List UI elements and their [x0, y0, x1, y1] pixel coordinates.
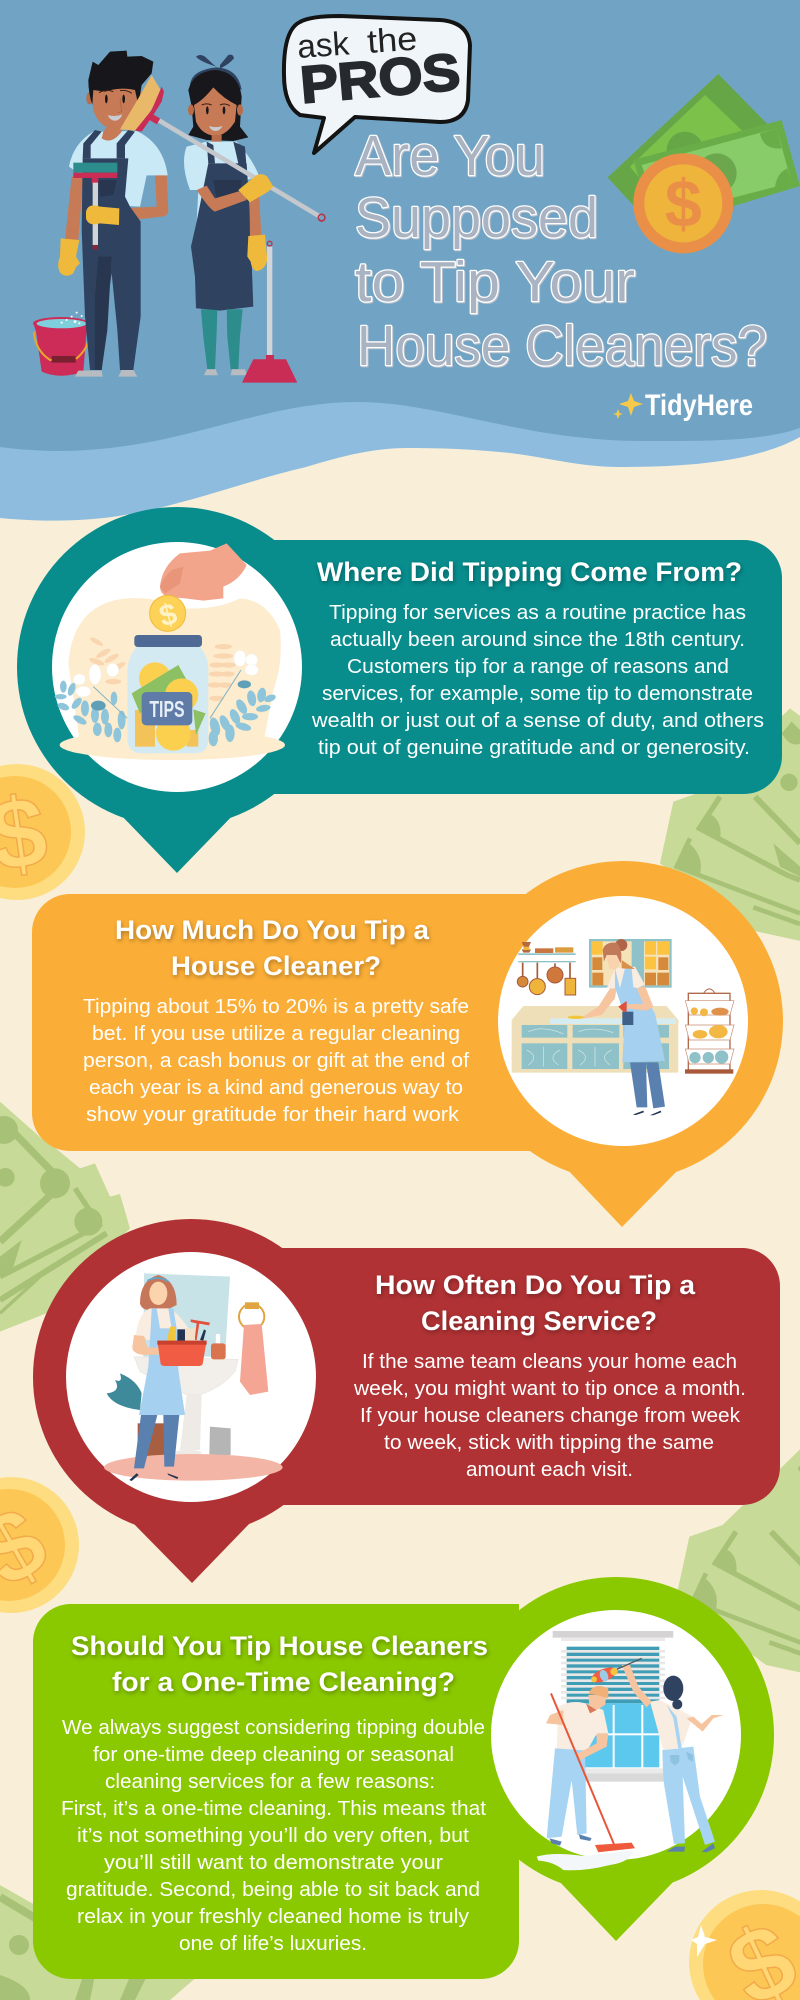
woman [184, 55, 297, 383]
heading [375, 1270, 696, 1336]
body text: Tipping for services as a routine practice has [329, 601, 746, 624]
title: House Cleaners? [357, 314, 767, 378]
header light blue wave [0, 402, 800, 540]
TidyHere logo: TidyHere [645, 389, 753, 422]
body text: show your gratitude for their hard work [86, 1103, 460, 1126]
icon: tip jar [55, 543, 285, 760]
heading: How Often Do You Tip a [375, 1270, 696, 1300]
basket rack [685, 989, 734, 1074]
body text: Tipping about 15% to 20% is a pretty safe [83, 995, 469, 1018]
speech bubble: ask the pros [284, 16, 470, 153]
body text: actually been around since the 18th century. [330, 628, 745, 651]
money and coin illustration [608, 74, 800, 253]
body text: services, for example, some tip to demonstrate [322, 682, 753, 705]
cream background wave [0, 437, 800, 2000]
body text: amount each visit. [466, 1458, 633, 1481]
heading: How Much Do You Tip a [115, 915, 430, 945]
icon: woman holding cleaning basket [104, 1273, 283, 1481]
heading: House Cleaner? [171, 951, 381, 981]
body text: it’s not something you’ll do very often, but [77, 1824, 469, 1847]
body text [83, 995, 469, 1126]
background money pile: upper right [660, 708, 800, 942]
speech bubble: ask the pros: ask [296, 24, 351, 65]
TidyHere logo [613, 389, 753, 422]
background money pile: bottom left [0, 1885, 199, 2000]
body text: First, it’s a one-time cleaning. This means that [61, 1797, 486, 1820]
body text: you’ll still want to demonstrate your [104, 1851, 443, 1874]
body text [311, 601, 764, 759]
background money pile: lower right [676, 1443, 800, 1677]
body text: We always suggest considering tipping double [62, 1716, 485, 1739]
panel: one-time cleaning [33, 1577, 774, 1979]
title: Are You [355, 124, 545, 188]
icon: bucket [33, 312, 89, 376]
body text: bet. If you use utilize a regular cleaning [92, 1022, 460, 1045]
speech bubble: ask the pros: the [366, 20, 418, 60]
icon: two cleaners at window [537, 1631, 723, 1870]
body text: person, a cash bonus or gift at the end of [83, 1049, 469, 1072]
body text: each year is a kind and generous way to [89, 1076, 463, 1099]
body text: gratitude. Second, being able to sit back and [66, 1878, 480, 1901]
body text [353, 1350, 746, 1481]
background coin: left upper [0, 764, 85, 900]
body text: for one-time deep cleaning or seasonal [93, 1743, 454, 1766]
title: Supposed [355, 186, 598, 250]
body text: cleaning services for a few reasons: [105, 1770, 435, 1793]
body text: If your house cleaners change from week [360, 1404, 741, 1427]
heading: Should You Tip House Cleaners [71, 1631, 488, 1661]
icon: woman wiping kitchen counter [512, 939, 734, 1115]
body text: week, you might want to tip once a month. [353, 1377, 746, 1400]
woman with duster [589, 1658, 723, 1852]
body text: to week, stick with tipping the same [384, 1431, 714, 1454]
body text: If the same team cleans your home each [362, 1350, 737, 1373]
panel: how much do you tip [32, 861, 783, 1227]
man with mop [546, 1686, 635, 1852]
body text: tip out of genuine gratitude and or generosity. [318, 736, 750, 759]
heading [115, 915, 430, 981]
icon: tip jar: $ [156, 597, 181, 634]
heading [71, 1631, 488, 1697]
title: to Tip Your [355, 250, 635, 314]
heading: for a One-Time Cleaning? [112, 1667, 455, 1697]
body text: relax in your freshly cleaned home is truly [77, 1905, 470, 1928]
icon: long brush over shoulders [120, 75, 325, 221]
speech bubble: ask the pros: PROS [298, 43, 462, 115]
icon: tip jar: TIPS [149, 696, 185, 722]
title [355, 124, 767, 378]
body text: one of life’s luxuries. [179, 1932, 367, 1955]
cleaners illustration: man and woman [33, 51, 325, 383]
money and coin illustration: $ [665, 168, 702, 242]
body text: Customers tip for a range of reasons and [347, 655, 729, 678]
background money pile: left [0, 1102, 130, 1332]
panel: where did tipping come from [17, 507, 782, 873]
body text [61, 1716, 486, 1955]
man [58, 51, 168, 377]
heading: Cleaning Service? [421, 1306, 657, 1336]
body text: wealth or just out of a sense of duty, and others [311, 709, 764, 732]
heading: Where Did Tipping Come From? [317, 557, 742, 587]
panel: how often do you tip [33, 1219, 780, 1583]
